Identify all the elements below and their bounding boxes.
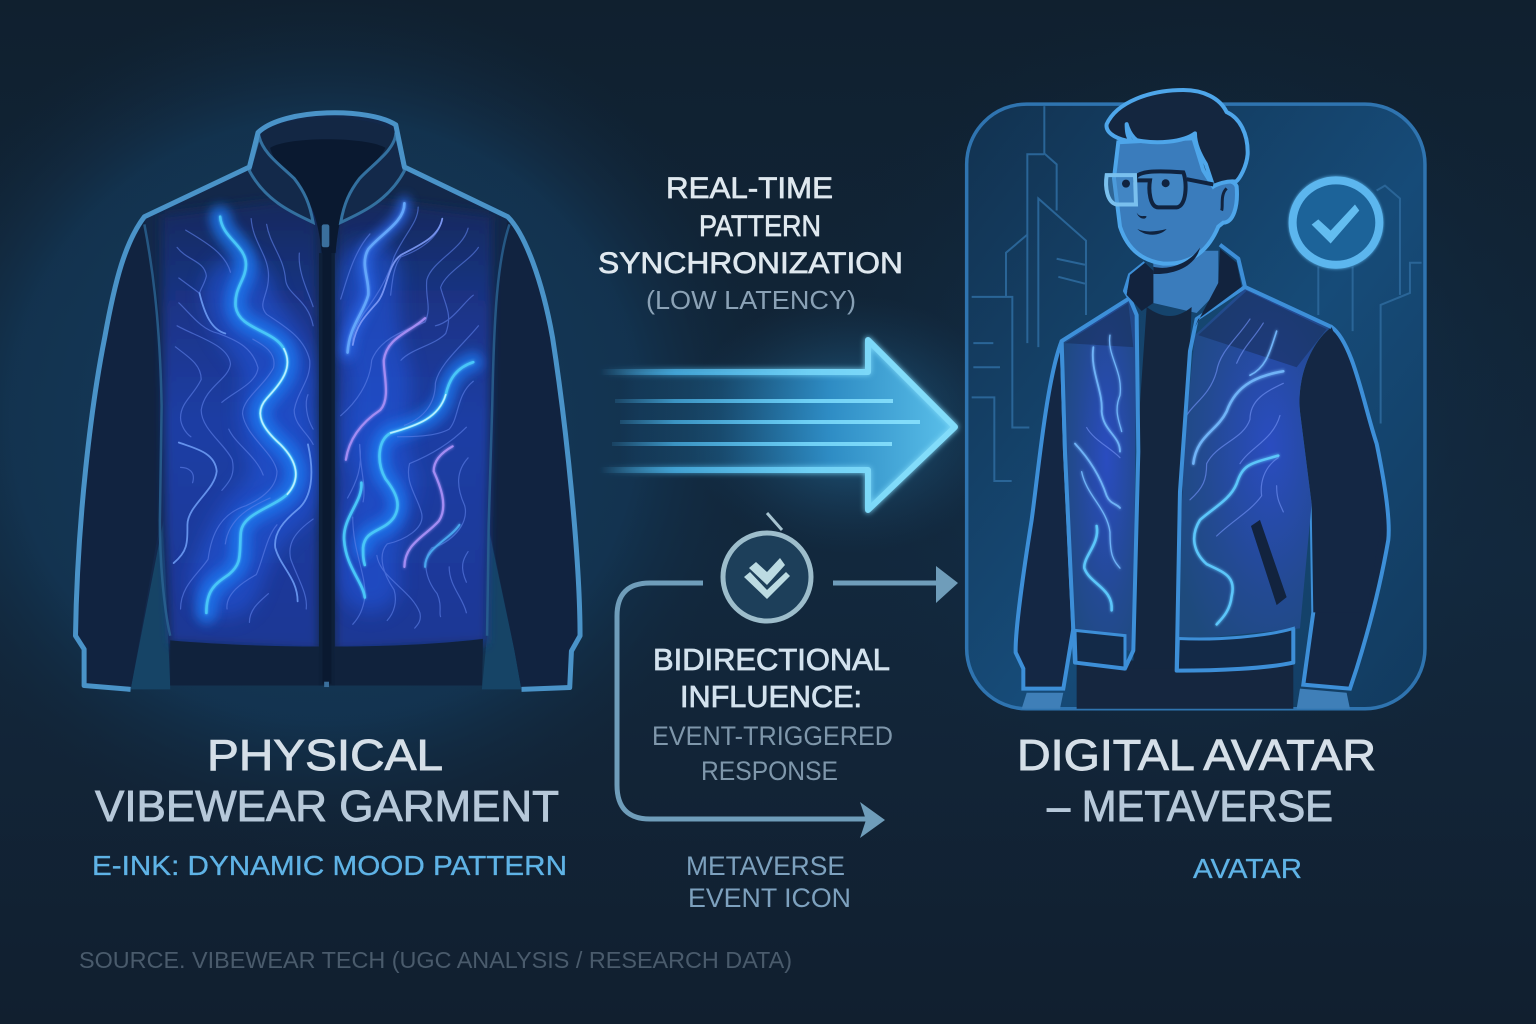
physical jacket illustration — [75, 112, 580, 689]
e-ink caption: E-INK: DYNAMIC MOOD PATTERN — [92, 850, 567, 881]
digital avatar heading — [1017, 731, 1376, 831]
sync text block: REAL-TIME — [666, 172, 833, 205]
jacket outline — [75, 113, 580, 689]
panel central glow — [225, 272, 387, 582]
physical garment heading: VIBEWEAR GARMENT — [95, 782, 559, 831]
collar and lapel outlines — [1062, 263, 1145, 669]
zipper — [319, 224, 335, 687]
gap between sleeve and body — [131, 517, 521, 689]
bidirectional text block: RESPONSE — [701, 756, 838, 786]
avatar caption: AVATAR — [1193, 853, 1302, 884]
collar right — [341, 133, 404, 222]
metaverse event icon label: METAVERSE — [686, 851, 845, 881]
neck shadow — [270, 139, 385, 253]
lower body — [1077, 661, 1293, 709]
metaverse event icon — [723, 513, 811, 621]
sync text block: SYNCHRONIZATION — [598, 247, 903, 280]
bidirectional text block: EVENT-TRIGGERED — [652, 721, 893, 751]
hair — [1107, 90, 1248, 186]
glasses — [1106, 171, 1213, 207]
neck — [1153, 251, 1218, 313]
jaw shadow — [1153, 248, 1200, 274]
physical garment heading — [95, 731, 559, 831]
sync text block: (LOW LATENCY) — [646, 285, 856, 315]
physical garment heading: PHYSICAL — [207, 731, 443, 780]
metaverse event icon label — [686, 851, 851, 913]
sleeve left — [1016, 341, 1073, 689]
city skyline — [972, 106, 1422, 481]
big sync arrow — [600, 295, 1015, 555]
bright wave lines — [206, 203, 473, 613]
jacket left sleeve — [75, 217, 162, 689]
jacket silhouette — [75, 112, 580, 689]
bidirectional text block — [652, 642, 893, 786]
purple wave lines — [346, 318, 453, 567]
t-shirt — [1133, 307, 1192, 669]
head — [1114, 138, 1237, 264]
collar fills — [1127, 249, 1242, 327]
avatar panel — [967, 90, 1425, 709]
faint wave lines — [175, 207, 478, 628]
arrow outline — [600, 340, 955, 510]
panel frame — [967, 104, 1425, 709]
arrow to avatar — [833, 566, 958, 603]
bidirectional text block: BIDIRECTIONAL — [653, 642, 890, 677]
check badge — [1293, 180, 1379, 265]
sleeve right — [1299, 327, 1389, 689]
avatar wave lines — [1075, 331, 1283, 624]
speed lines — [612, 401, 920, 444]
right sleeve dark overlap — [1299, 327, 1383, 612]
sync text block: PATTERN — [699, 210, 821, 243]
bidirectional text block: INFLUENCE: — [680, 679, 862, 714]
glowing e-ink panel — [162, 196, 492, 651]
hem bands — [1075, 630, 1125, 669]
metaverse event icon label: EVENT ICON — [688, 883, 851, 913]
hem band — [170, 639, 483, 686]
hands — [1022, 689, 1350, 709]
source line: SOURCE. VIBEWEAR TECH (UGC ANALYSIS / RESEARCH DATA) — [79, 947, 792, 973]
jacket right front — [1178, 287, 1332, 640]
bidirectional loop arrow — [617, 583, 885, 838]
ear detail — [1222, 188, 1227, 211]
neck opening — [261, 118, 394, 253]
armhole seams — [144, 224, 509, 636]
digital avatar heading: DIGITAL AVATAR — [1017, 731, 1376, 780]
jacket right sleeve — [491, 217, 580, 689]
avatar faint waves — [1087, 319, 1283, 536]
sync text block — [598, 172, 903, 315]
mid wave lines — [174, 219, 442, 601]
pocket — [1251, 520, 1287, 605]
collar left — [249, 136, 313, 222]
jacket left front — [1062, 299, 1137, 653]
wave glow halos — [206, 203, 473, 613]
digital avatar heading: – METAVERSE — [1047, 782, 1333, 831]
white core of bright waves — [260, 349, 446, 494]
eyes, nose and mouth — [1122, 179, 1170, 235]
double chevron — [749, 558, 785, 585]
yoke shading — [1065, 291, 1327, 367]
